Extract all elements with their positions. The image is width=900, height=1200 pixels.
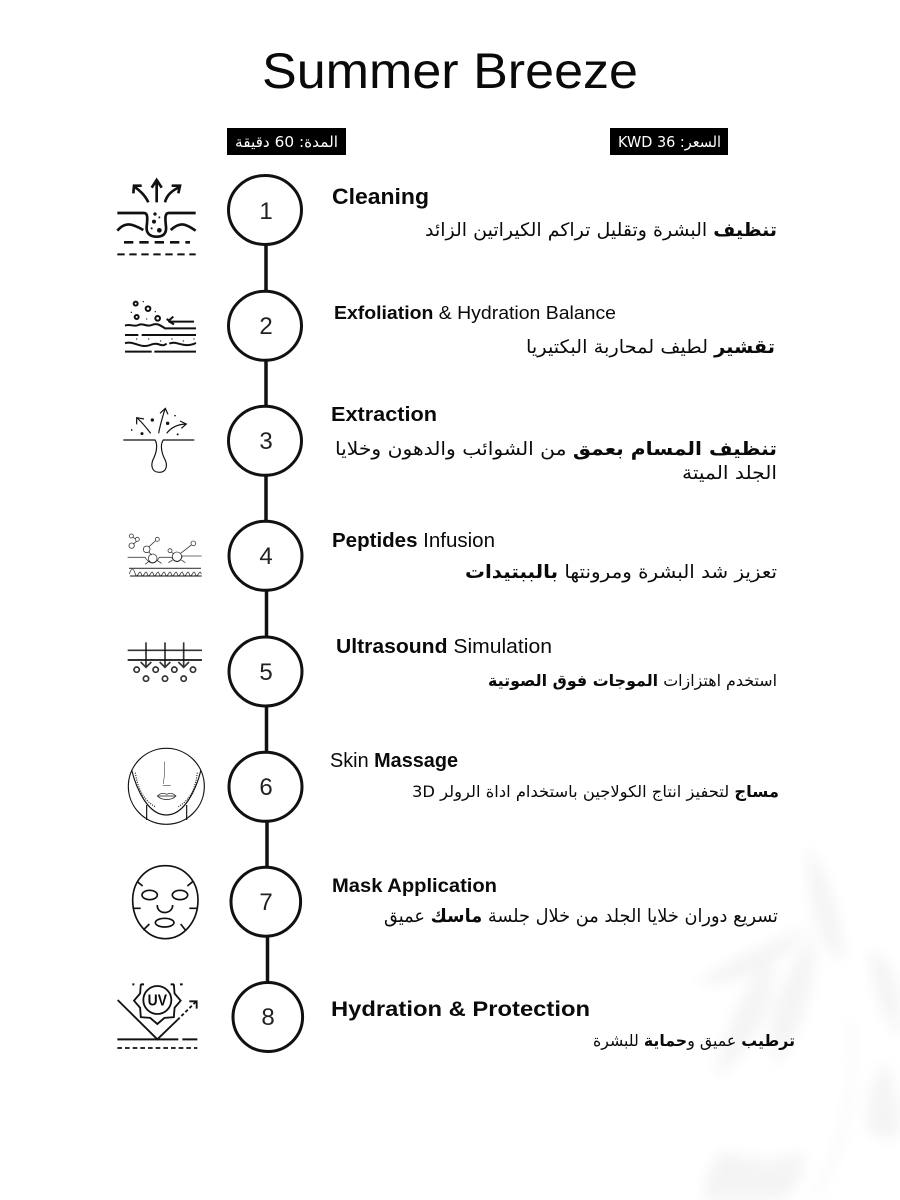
icon: peptide molecules (128, 534, 202, 576)
icon: ultrasound arrows (128, 642, 202, 681)
step circle 7 (231, 867, 301, 936)
price badge: السعر: 36 KWD (618, 133, 721, 151)
icon: pore purge arrows (117, 180, 196, 254)
step 6 description: مساج لتحفيز انتاج الكولاجين باستخدام اداة الرولر 3D (412, 782, 779, 802)
step 4 description: تعزيز شد البشرة ومرونتها بالببتيدات (465, 562, 777, 583)
step 7 description: تسريع دوران خلايا الجلد من خلال جلسة ماسك عميق (384, 906, 778, 927)
step circle 2 (228, 291, 302, 360)
step circle 5: 5 (259, 659, 273, 686)
step 7 heading: Mask Application (332, 876, 497, 897)
step circle 7: 7 (259, 889, 273, 916)
step 4 heading: Peptides Infusion (332, 530, 495, 552)
step circle 5 (229, 637, 302, 706)
step 8 heading: Hydration & Protection (331, 998, 590, 1021)
background leaf watermark (695, 845, 900, 1200)
step circle 8 (233, 982, 303, 1052)
step circle 1: 1 (259, 198, 273, 225)
step circle 3: 3 (259, 428, 273, 455)
icon: extraction pore (123, 408, 194, 472)
icon: exfoliation layers (125, 301, 196, 352)
step circle 2: 2 (259, 313, 273, 340)
step 8 description: ترطيب عميق وحماية للبشرة (593, 1031, 795, 1051)
timeline connectors (266, 245, 268, 982)
step circle 6 (229, 752, 302, 821)
step 6 heading: Skin Massage (330, 750, 458, 772)
icon: UV protection (117, 984, 197, 1048)
duration badge: المدة: 60 دقيقة (235, 133, 338, 151)
title: Summer Breeze (262, 43, 638, 99)
step 3 description line 2: الجلد الميتة (682, 463, 777, 484)
step circle 8: 8 (261, 1004, 275, 1031)
step circle 4: 4 (259, 543, 273, 570)
step 3 heading: Extraction (331, 404, 437, 426)
step 1 heading: Cleaning (332, 184, 429, 209)
step 2 description: تقشير لطيف لمحاربة البكتيريا (526, 337, 775, 358)
price badge (610, 128, 728, 155)
step circle 6: 6 (259, 774, 273, 801)
step 2 heading: Exfoliation & Hydration Balance (334, 303, 616, 323)
step circle 3 (228, 406, 302, 475)
icon: UV protection: UV (148, 993, 168, 1010)
step 5 heading: Ultrasound Simulation (336, 636, 552, 658)
icon: sheet mask (133, 866, 198, 939)
step 5 description: استخدم اهتزازات الموجات فوق الصوتية (488, 671, 777, 691)
step circle 1 (228, 176, 302, 244)
duration badge (227, 128, 346, 155)
icon: face massage (128, 748, 204, 824)
step 3 description line 1: تنظيف المسام بعمق من الشوائب والدهون وخلايا (335, 439, 777, 460)
step circle 4 (229, 521, 302, 590)
step 1 description: تنظيف البشرة وتقليل تراكم الكيراتين الزائد (425, 220, 777, 241)
